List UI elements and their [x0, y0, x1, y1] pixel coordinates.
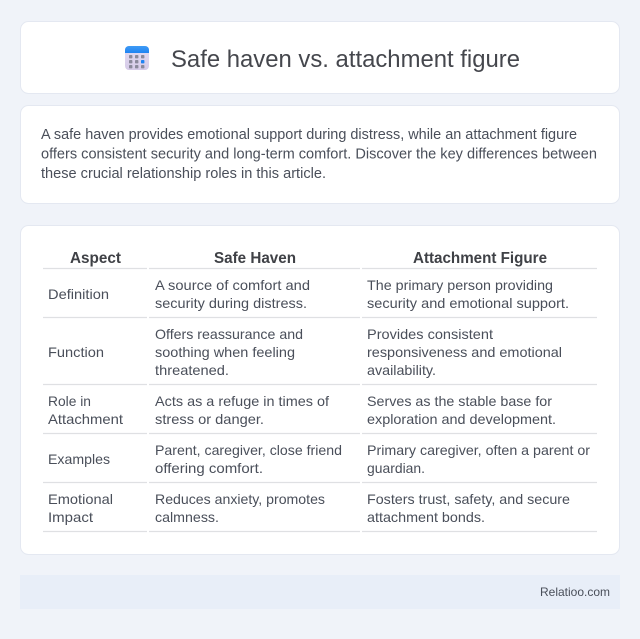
row: function: responsiveness and emotional	[367, 344, 562, 360]
row: function: threatened.	[155, 362, 229, 378]
panel: intro text	[20, 106, 620, 204]
panel: title card	[20, 22, 620, 94]
panel: footer	[20, 575, 620, 609]
intro paragraph: offers consistent security and long-term comfort. Discover the key differences between	[41, 146, 597, 162]
row: examples: Parent, caregiver, close friend	[155, 442, 342, 458]
row: function: Function	[48, 344, 104, 360]
panel: comparison table	[20, 226, 620, 554]
row: emotional impact: Emotional	[48, 491, 113, 507]
row: emotional impact	[48, 491, 570, 525]
row: examples: guardian.	[367, 460, 425, 476]
row: function: Offers reassurance and	[155, 326, 303, 342]
row: emotional impact: calmness.	[155, 509, 219, 525]
row: definition: Definition	[48, 286, 109, 302]
row: definition	[48, 277, 569, 311]
row: role in attachment: Serves as the stable base for	[367, 393, 552, 409]
row: role in attachment: Role in	[48, 393, 91, 409]
table header: Aspect	[70, 250, 122, 267]
row: role in attachment: Acts as a refuge in times of	[155, 393, 329, 409]
row: definition: A source of comfort and	[155, 277, 310, 293]
row: function	[48, 326, 562, 378]
row: definition: security and emotional support.	[367, 295, 569, 311]
row: emotional impact: Fosters trust, safety, and secure	[367, 491, 570, 507]
icon: calendar	[125, 46, 149, 70]
table header	[70, 250, 547, 267]
row: role in attachment: stress or danger.	[155, 411, 264, 427]
row: examples: Examples	[48, 451, 110, 467]
intro paragraph: A safe haven provides emotional support during distress, while an attachment figure	[41, 127, 577, 143]
title: Safe haven vs. attachment figure	[171, 46, 520, 73]
row: emotional impact: Impact	[48, 509, 93, 525]
intro paragraph	[41, 127, 597, 182]
row: examples: Primary caregiver, often a parent or	[367, 442, 590, 458]
row: function: Provides consistent	[367, 326, 493, 342]
row: examples	[48, 442, 590, 476]
row: emotional impact: Reduces anxiety, promotes	[155, 491, 325, 507]
table header: Safe Haven	[214, 250, 296, 267]
footer text: Relatioo.com	[540, 585, 610, 599]
row: function: soothing when feeling	[155, 344, 295, 360]
row: definition: The primary person providing	[367, 277, 553, 293]
row: role in attachment: Attachment	[48, 411, 123, 427]
table header: Attachment Figure	[413, 250, 547, 267]
row: role in attachment	[48, 393, 556, 427]
intro paragraph: these crucial relationship roles in this article.	[41, 166, 326, 182]
row: definition: security during distress.	[155, 295, 307, 311]
row: role in attachment: exploration and development.	[367, 411, 556, 427]
row: emotional impact: attachment bonds.	[367, 509, 485, 525]
row: function: availability.	[367, 362, 436, 378]
row: examples: offering comfort.	[155, 460, 263, 476]
